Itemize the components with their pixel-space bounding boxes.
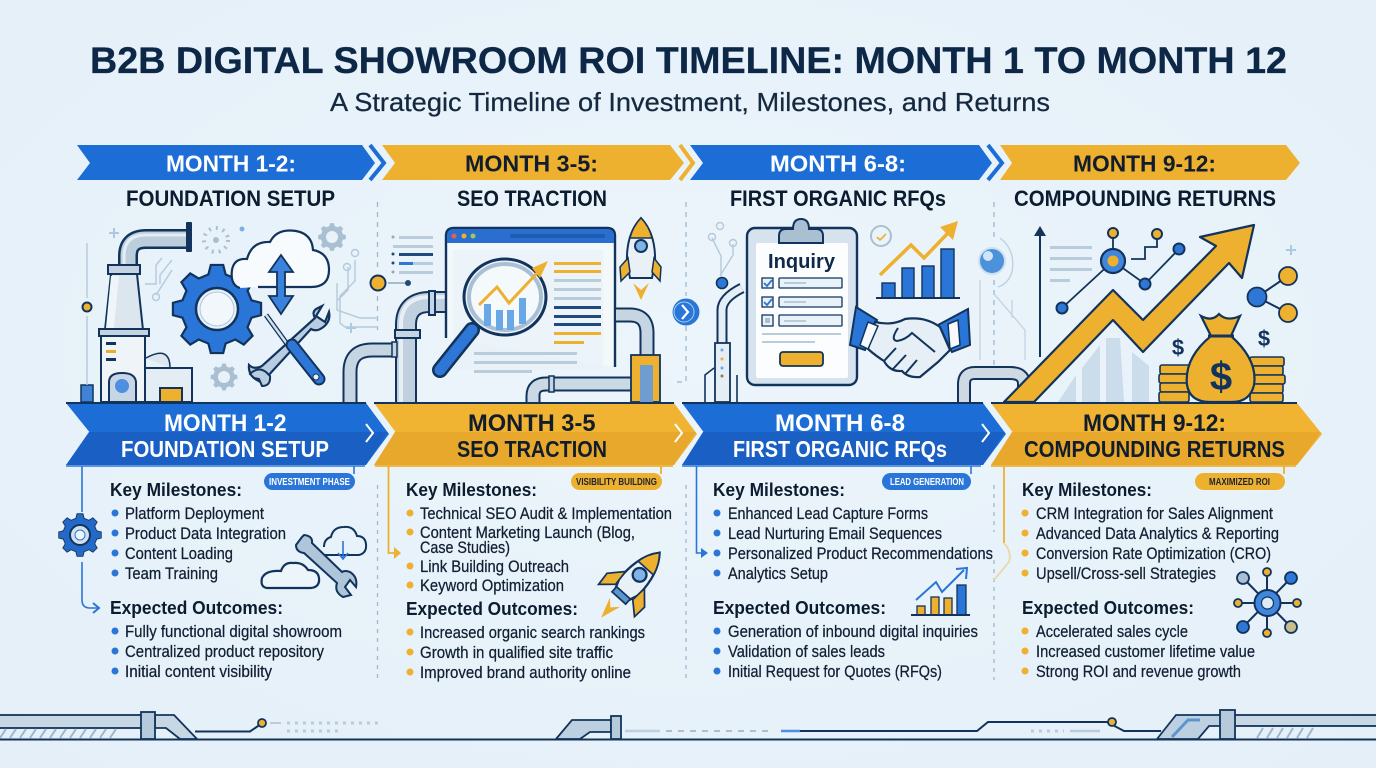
cloud with sync arrow: [232, 230, 329, 314]
milestone list: Upsell/Cross-sell Strategies: [1036, 564, 1216, 583]
globe: [979, 238, 1025, 360]
lower banners: [66, 403, 1322, 465]
milestone list: Lead Nurturing Email Sequences: [728, 524, 942, 543]
banner: month 6-8 first organic rfqs: MONTH 6-8: [775, 410, 905, 437]
illustration: seo traction browser, magnifier, pipes, rocket: [350, 218, 700, 402]
banner: month 9-12 compounding returns: [991, 403, 1322, 465]
milestone list: Content Loading: [125, 544, 233, 563]
rocket: [620, 218, 661, 300]
illustration: foundation setup factory, gear, cloud, tools: [81, 222, 378, 402]
seo pipes: [350, 291, 631, 402]
phase heading: first organic rfqs: FIRST ORGANIC RFQs: [730, 186, 946, 211]
outcome list: Fully functional digital showroom: [125, 622, 342, 641]
banner: month 1-2 foundation setup: FOUNDATION SETUP: [121, 436, 329, 462]
pale background bars: [1058, 338, 1149, 402]
heading: key milestones: Key Milestones:: [713, 479, 845, 500]
pill: visibility building: VISIBILITY BUILDING: [576, 477, 657, 488]
side text lines and node: [370, 236, 433, 290]
wrench and screwdriver: [249, 306, 329, 386]
heading: expected outcomes: Expected Outcomes:: [110, 597, 283, 618]
banner: month 6-8 first organic rfqs: [682, 403, 1006, 465]
milestone list: Keyword Optimization: [420, 576, 564, 595]
heading: expected outcomes: Expected Outcomes:: [713, 597, 886, 618]
pill: lead generation: LEAD GENERATION: [890, 477, 964, 488]
milestone list: Enhanced Lead Capture Forms: [728, 504, 928, 523]
banner: month 3-5 seo traction: SEO TRACTION: [457, 436, 607, 462]
outcome list: [714, 622, 978, 681]
milestone list: Case Studies): [420, 538, 510, 557]
connector: column 1 with gear: [59, 466, 365, 613]
circuit traces: [145, 250, 378, 327]
outcome list: Initial content visibility: [125, 662, 272, 681]
heading: key milestones: Key Milestones:: [406, 479, 537, 500]
milestone list: Platform Deployment: [125, 504, 264, 523]
outcome list: Generation of inbound digital inquiries: [728, 622, 978, 641]
ribbon: month 3-5: [382, 145, 693, 180]
icon: rocket: [582, 536, 678, 635]
outcome list: Initial Request for Quotes (RFQs): [728, 662, 942, 681]
phase heading: compounding returns: COMPOUNDING RETURNS: [1014, 186, 1276, 211]
milestone list: CRM Integration for Sales Alignment: [1036, 504, 1273, 523]
ribbon: month 6-8: MONTH 6-8:: [770, 150, 906, 176]
icon: hub network: [1234, 568, 1301, 637]
big blue gear: [173, 265, 261, 353]
outcome list: Validation of sales leads: [728, 642, 885, 661]
outcome list: Increased customer lifetime value: [1036, 642, 1255, 661]
connector chevron badge: [672, 298, 700, 326]
outcome list: Improved brand authority online: [420, 663, 631, 682]
ribbon: month 1-2: [77, 145, 384, 180]
outcome list: Growth in qualified site traffic: [420, 643, 613, 662]
coin stacks and money bag: $: [1258, 326, 1270, 351]
outcome list: Increased organic search rankings: [420, 623, 645, 642]
panel: foundation setup details: [110, 479, 366, 681]
milestone list: Product Data Integration: [125, 524, 286, 543]
heading: expected outcomes: Expected Outcomes:: [406, 598, 578, 619]
illustration: first organic rfqs clipboard, chart, handshake: [705, 219, 970, 402]
ribbon: month 3-5: MONTH 3-5:: [465, 150, 598, 176]
outcome list: Accelerated sales cycle: [1036, 622, 1188, 641]
title: B2B DIGITAL SHOWROOM ROI TIMELINE: MONTH 1 TO MONTH 12: [90, 40, 1287, 81]
milestone list: Link Building Outreach: [420, 557, 569, 576]
factory pipe tower: [81, 222, 192, 402]
milestone list: Advanced Data Analytics & Reporting: [1036, 524, 1279, 543]
phase heading: seo traction: SEO TRACTION: [457, 186, 607, 211]
right pipe and gauge box: [616, 315, 660, 402]
heading: key milestones: Key Milestones:: [1022, 479, 1152, 500]
milestone list: Technical SEO Audit & Implementation: [420, 504, 672, 523]
pill: visibility building: [571, 473, 662, 490]
pill: maximized roi: [1195, 473, 1285, 490]
share nodes: [1248, 245, 1297, 322]
connector: column 3: [682, 466, 981, 558]
panel: compounding returns details: [1022, 479, 1301, 681]
right pipe: [1157, 710, 1376, 739]
banner: month 3-5 seo traction: [374, 403, 697, 465]
outcome list: [112, 622, 342, 681]
network nodes: [1056, 228, 1184, 314]
outcome list: Centralized product repository: [125, 642, 324, 661]
pill: investment phase: INVESTMENT PHASE: [269, 477, 350, 488]
top timeline ribbons: [77, 145, 1300, 180]
banner: month 1-2 foundation setup: MONTH 1-2: [164, 410, 286, 437]
big gold growth arrow: [1004, 225, 1254, 402]
inquiry clipboard: Inquiry: [768, 251, 836, 273]
milestone list: Conversion Rate Optimization (CRO): [1036, 544, 1271, 563]
pipe arch: [964, 373, 1024, 402]
center pipe: [556, 716, 1161, 739]
outcome list: Strong ROI and revenue growth: [1036, 662, 1241, 681]
tower and circuit: [705, 222, 742, 402]
connector: column 4: [991, 466, 1296, 580]
milestone list: [112, 504, 286, 583]
up axis arrow: [1034, 226, 1046, 357]
outcome list: [406, 623, 645, 682]
pill: investment phase: [264, 473, 355, 490]
milestone list: [1022, 504, 1279, 583]
inquiry clipboard: [747, 219, 857, 385]
ribbon: month 6-8: [690, 145, 1002, 180]
milestone list: Team Training: [125, 564, 218, 583]
browser window: [446, 228, 615, 373]
inquiry bar chart: [871, 221, 960, 298]
pill: maximized roi: MAXIMIZED ROI: [1209, 477, 1270, 488]
milestone list: [406, 504, 672, 595]
banner: month 9-12 compounding returns: COMPOUNDING RETURNS: [1024, 436, 1285, 462]
small gears: [109, 223, 356, 390]
banner: month 3-5 seo traction: MONTH 3-5: [468, 410, 596, 437]
subtitle: A Strategic Timeline of Investment, Milestones, and Returns: [330, 87, 1050, 117]
icon: wrench and clouds: [262, 527, 366, 597]
coin stacks and money bag: $: [1210, 355, 1232, 399]
banner: month 9-12 compounding returns: MONTH 9-12:: [1083, 410, 1226, 437]
magnifying glass with growth chart: [440, 259, 548, 370]
banner: month 1-2 foundation setup: [66, 403, 389, 465]
heading: expected outcomes: Expected Outcomes:: [1022, 597, 1194, 618]
panel: seo traction details: [406, 479, 678, 682]
icon: growth chart: [911, 568, 970, 615]
milestone list: Analytics Setup: [728, 564, 828, 583]
banner: month 6-8 first organic rfqs: FIRST ORGANIC RFQs: [733, 436, 947, 462]
heading: key milestones: Key Milestones:: [110, 479, 242, 500]
handshake: [850, 307, 970, 377]
milestone list: Content Marketing Launch (Blog,: [420, 523, 635, 542]
connector: column 2: [375, 466, 673, 559]
milestone list: [714, 504, 993, 583]
ribbon: month 9-12: MONTH 9-12:: [1073, 150, 1216, 176]
decorative pipeline strip: [0, 710, 1376, 740]
ribbon: month 1-2: MONTH 1-2:: [166, 150, 296, 176]
left pipe: [0, 712, 380, 739]
illustration: compounding returns arrow, network, money: [964, 225, 1297, 402]
panel: first organic rfqs details: [713, 479, 993, 681]
outcome list: [1022, 622, 1255, 681]
coin stacks and money bag: $: [1172, 335, 1184, 360]
pill: lead generation: [882, 473, 971, 490]
phase heading: foundation setup: FOUNDATION SETUP: [126, 186, 335, 211]
milestone list: Personalized Product Recommendations: [728, 544, 993, 563]
ribbon: month 9-12: [1000, 145, 1300, 180]
coin stacks and money bag: [1159, 314, 1285, 402]
